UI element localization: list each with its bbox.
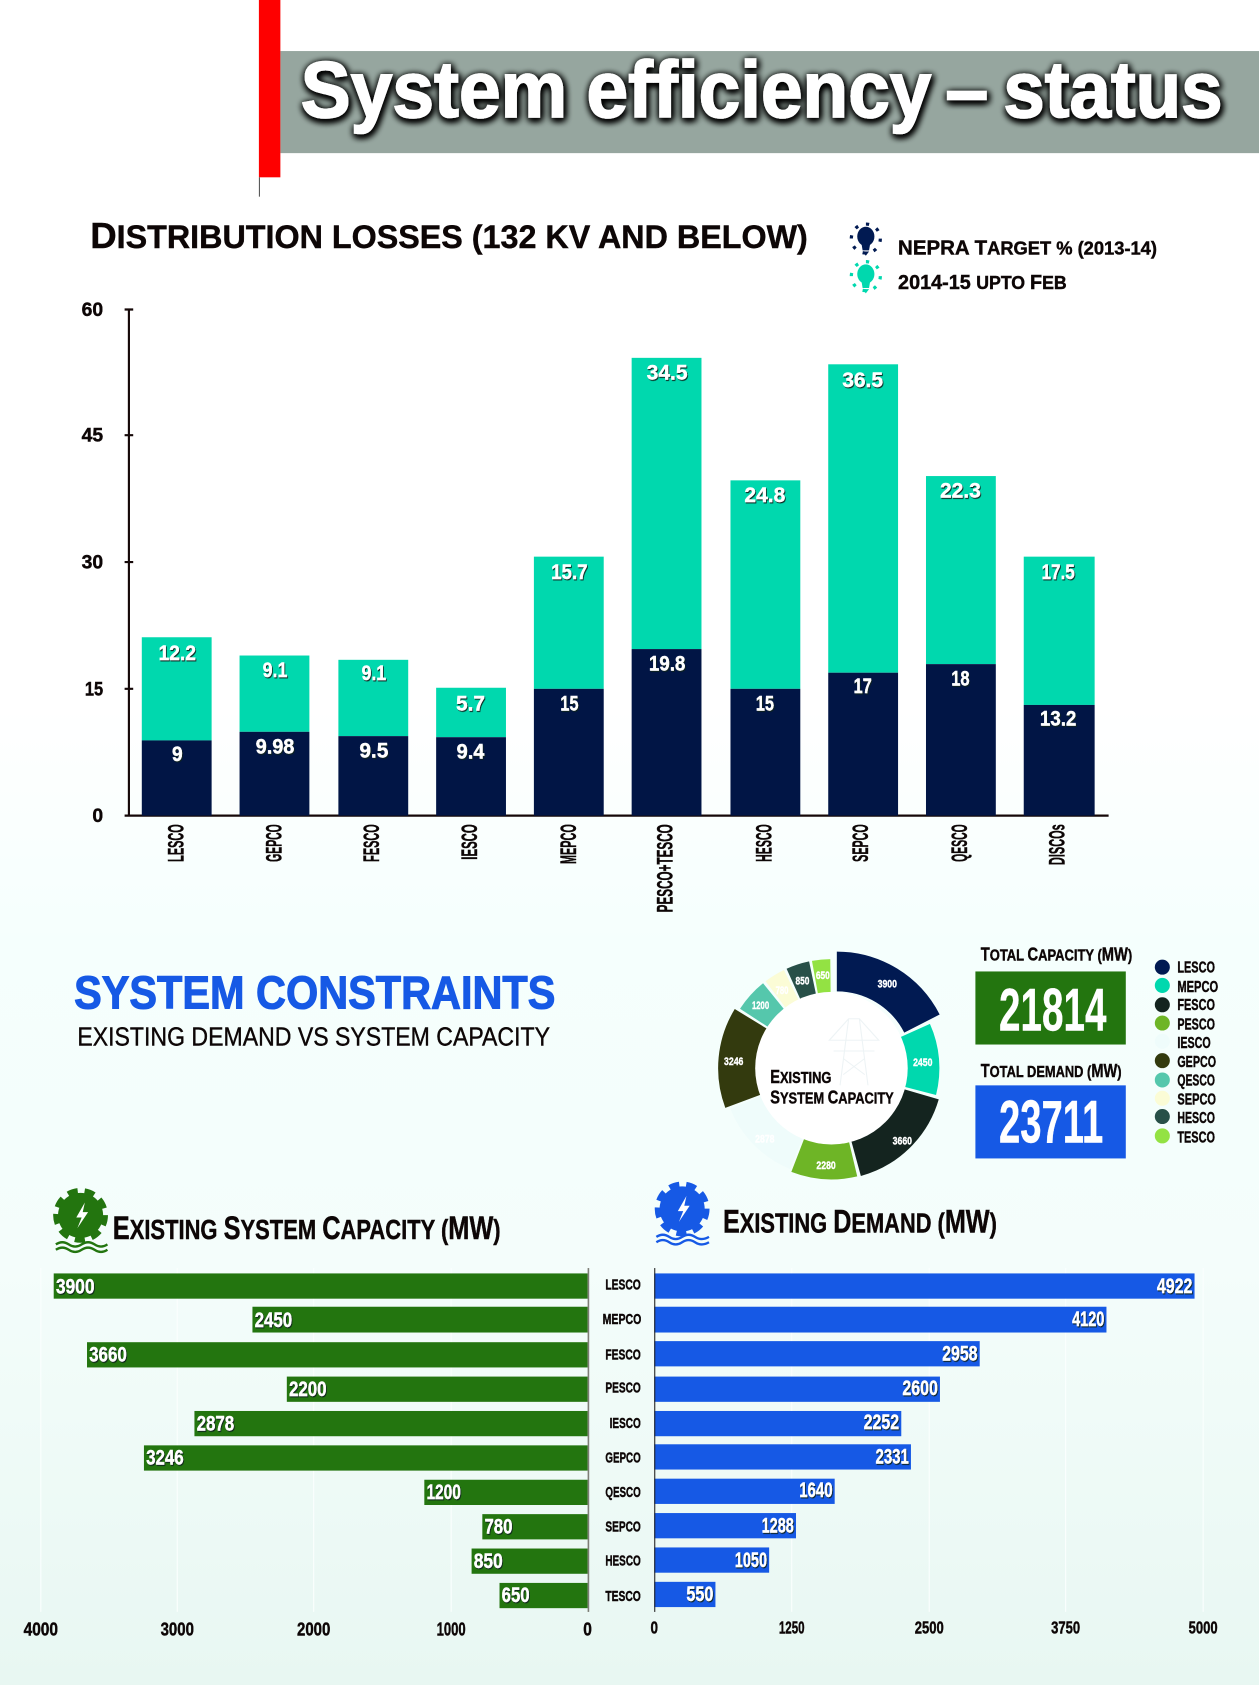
slice values: 2280 bbox=[816, 1160, 836, 1172]
bar: SEPCO bbox=[828, 364, 898, 862]
capacity bars bbox=[54, 1273, 588, 1608]
shared company labels: SEPCO bbox=[605, 1518, 641, 1535]
y axis: 45 bbox=[82, 426, 103, 447]
panel: total capacity: 21814 bbox=[999, 977, 1107, 1044]
demand values bbox=[686, 1274, 1192, 1606]
title text bbox=[301, 45, 1222, 134]
demand axis labels bbox=[650, 1617, 1218, 1637]
bar: MEPCO: 15.7 bbox=[551, 560, 588, 584]
y axis: 30 bbox=[82, 552, 103, 573]
bar chart: existing demand bbox=[650, 1268, 1218, 1637]
panel: total capacity: TOTAL CAPACITY (MW) bbox=[981, 944, 1132, 965]
bar: QESCO: 18 bbox=[951, 667, 970, 691]
demand values: 1640 bbox=[799, 1478, 833, 1502]
slice values: 3900 bbox=[878, 979, 897, 991]
capacity axis labels: 4000 bbox=[24, 1619, 58, 1640]
capacity axis labels: 1000 bbox=[437, 1619, 466, 1640]
capacity values: 780 bbox=[484, 1514, 512, 1538]
bar: HESCO: 15 bbox=[756, 691, 774, 715]
title text: status bbox=[1003, 45, 1222, 134]
title text: System bbox=[301, 45, 567, 134]
demand axis labels: 0 bbox=[650, 1617, 658, 1637]
demand values: 550 bbox=[686, 1582, 713, 1606]
shared company labels: TESCO bbox=[605, 1588, 641, 1605]
shared company labels: GEPCO bbox=[605, 1450, 641, 1467]
bar: DISCOs: 17.5 bbox=[1041, 560, 1075, 584]
capacity values: 3660 bbox=[89, 1343, 127, 1367]
demand values: 2331 bbox=[875, 1445, 909, 1469]
donut legend: SEPCO bbox=[1177, 1091, 1216, 1109]
bar: MEPCO: 15 bbox=[560, 691, 579, 715]
demand values: 2600 bbox=[902, 1376, 938, 1400]
bar: SEPCO: 17 bbox=[853, 674, 872, 698]
demand bars bbox=[654, 1273, 1195, 1607]
capacity values: 850 bbox=[474, 1549, 503, 1573]
capacity axis labels: 3000 bbox=[161, 1619, 194, 1640]
demand values: 1288 bbox=[762, 1513, 794, 1537]
title text: efficiency bbox=[587, 45, 931, 134]
icon: transmission tower bbox=[829, 1019, 879, 1085]
icon: teal bulb bbox=[851, 262, 880, 293]
panel: total demand: TOTAL DEMAND (MW) bbox=[981, 1060, 1121, 1081]
capacity values: 3900 bbox=[56, 1274, 95, 1298]
bar: LESCO: 9 bbox=[172, 742, 183, 766]
heading: existing demand: EXISTING DEMAND (MW) bbox=[723, 1204, 997, 1240]
shared company labels: QESCO bbox=[605, 1484, 641, 1501]
title band bbox=[259, 0, 1259, 197]
demand axis labels: 5000 bbox=[1189, 1617, 1218, 1637]
demand values: 2252 bbox=[864, 1410, 899, 1434]
donut legend: QESCO bbox=[1177, 1071, 1215, 1089]
slice values bbox=[724, 970, 932, 1172]
donut legend: GEPCO bbox=[1177, 1053, 1216, 1071]
bar: PESCO+TESCO: 34.5 bbox=[647, 360, 688, 384]
bar: QESCO: 22.3 bbox=[940, 479, 981, 503]
capacity axis labels: 2000 bbox=[297, 1619, 330, 1640]
bar: IESCO: IESCO bbox=[457, 824, 482, 860]
bar: MEPCO bbox=[534, 557, 604, 864]
stacked bar chart: distribution losses bbox=[82, 300, 1109, 912]
demand values: 2958 bbox=[942, 1341, 978, 1365]
donut legend bbox=[1155, 959, 1218, 1146]
demand values: 4922 bbox=[1157, 1274, 1192, 1298]
bar: HESCO bbox=[730, 480, 800, 862]
demand axis labels: 1250 bbox=[779, 1617, 805, 1637]
bar: GEPCO: GEPCO bbox=[261, 824, 286, 862]
capacity values: 2450 bbox=[255, 1308, 292, 1332]
shared company labels: LESCO bbox=[605, 1277, 641, 1294]
bar: GEPCO: 9.98 bbox=[256, 734, 294, 758]
slice values: 2878 bbox=[755, 1133, 775, 1145]
slice values: 2450 bbox=[913, 1057, 932, 1069]
slices bbox=[702, 939, 961, 1198]
icon: navy bulb bbox=[851, 224, 880, 256]
donut legend: TESCO bbox=[1177, 1128, 1215, 1146]
shared company labels: PESCO bbox=[605, 1380, 641, 1397]
panel: total capacity bbox=[975, 944, 1132, 1045]
donut legend: HESCO bbox=[1177, 1109, 1215, 1127]
demand axis labels: 3750 bbox=[1051, 1617, 1080, 1637]
shared company labels: HESCO bbox=[605, 1553, 641, 1570]
slice values: 1200 bbox=[752, 1000, 769, 1012]
chart legend: NEPRA TARGET % (2013-14) bbox=[898, 238, 1157, 260]
bar: FESCO: 9.5 bbox=[359, 739, 388, 763]
donut legend: FESCO bbox=[1177, 996, 1215, 1014]
bar: GEPCO: 9.1 bbox=[263, 658, 287, 682]
bar: LESCO bbox=[142, 637, 212, 862]
y axis bbox=[82, 300, 1109, 827]
capacity axis labels bbox=[24, 1619, 592, 1640]
slice values: 3246 bbox=[724, 1056, 743, 1068]
bar: FESCO bbox=[338, 660, 408, 862]
bar: SEPCO: SEPCO bbox=[848, 824, 873, 862]
section heading: system constraints bbox=[74, 967, 555, 1052]
chart heading: distribution losses: DISTRIBUTION LOSSES (132 KV AND BELOW) bbox=[90, 215, 808, 256]
bar chart: existing system capacity bbox=[24, 1268, 592, 1640]
icon: blue gear with bolt and waves bbox=[656, 1184, 709, 1244]
shared company labels: IESCO bbox=[610, 1415, 641, 1432]
donut legend: MEPCO bbox=[1177, 978, 1218, 996]
donut centre label: SYSTEM CAPACITY bbox=[770, 1087, 894, 1108]
donut legend: PESCO bbox=[1177, 1015, 1215, 1033]
bar: LESCO: LESCO bbox=[164, 824, 189, 862]
capacity values: 2200 bbox=[289, 1377, 327, 1401]
demand axis labels: 2500 bbox=[915, 1617, 944, 1637]
bar: PESCO+TESCO: PESCO+TESCO bbox=[652, 824, 677, 912]
donut legend: LESCO bbox=[1177, 959, 1215, 977]
demand values: 1050 bbox=[735, 1548, 767, 1572]
capacity values: 3246 bbox=[146, 1446, 184, 1470]
slice values: 780 bbox=[776, 985, 788, 997]
donut centre label: EXISTING bbox=[770, 1066, 831, 1087]
y axis: 15 bbox=[85, 679, 103, 700]
slice values: 3660 bbox=[893, 1135, 912, 1147]
bar: QESCO bbox=[926, 476, 996, 862]
donut legend: IESCO bbox=[1177, 1034, 1211, 1052]
capacity values: 2878 bbox=[197, 1411, 234, 1435]
shared company labels bbox=[603, 1277, 642, 1605]
bar: FESCO: FESCO bbox=[359, 824, 384, 862]
bar: QESCO: QESCO bbox=[947, 824, 972, 862]
slice values: 850 bbox=[795, 975, 809, 987]
bar: DISCOs: 13.2 bbox=[1040, 706, 1076, 730]
subheading: EXISTING DEMAND VS SYSTEM CAPACITY bbox=[77, 1024, 550, 1052]
heading: existing system capacity: EXISTING SYSTEM CAPACITY (MW) bbox=[113, 1210, 501, 1246]
bar: IESCO: 5.7 bbox=[456, 691, 485, 715]
bar: PESCO+TESCO: 19.8 bbox=[649, 652, 685, 676]
y axis: 0 bbox=[92, 806, 103, 827]
panel: total demand: 23711 bbox=[999, 1088, 1103, 1155]
slice values: 650 bbox=[816, 970, 830, 982]
bar: LESCO: 12.2 bbox=[158, 641, 196, 665]
chart legend: 2014-15 UPTO FEB bbox=[898, 272, 1067, 294]
bar: IESCO: 9.4 bbox=[457, 740, 485, 764]
capacity values bbox=[56, 1274, 530, 1607]
capacity values: 1200 bbox=[426, 1480, 461, 1504]
capacity axis labels: 0 bbox=[583, 1619, 592, 1640]
bar: PESCO+TESCO bbox=[632, 358, 701, 912]
demand values: 4120 bbox=[1072, 1307, 1104, 1331]
capacity values: 650 bbox=[502, 1583, 530, 1607]
donut chart: existing system capacity bbox=[702, 939, 961, 1198]
section heading: system constraints: SYSTEM CONSTRAINTS bbox=[74, 967, 555, 1019]
title text: – bbox=[945, 45, 988, 134]
chart legend bbox=[851, 224, 1157, 294]
bar: DISCOs: DISCOs bbox=[1045, 824, 1070, 865]
panel: total demand bbox=[975, 1060, 1126, 1158]
bar: MEPCO: MEPCO bbox=[556, 824, 581, 864]
shared company labels: MEPCO bbox=[603, 1311, 642, 1328]
bar: IESCO bbox=[436, 688, 506, 860]
y axis: 60 bbox=[82, 300, 103, 321]
bar: SEPCO: 36.5 bbox=[842, 368, 883, 392]
shared company labels: FESCO bbox=[605, 1346, 641, 1363]
bar: FESCO: 9.1 bbox=[361, 661, 386, 685]
bar: HESCO: HESCO bbox=[751, 824, 776, 862]
icon: green gear with bolt and waves bbox=[56, 1191, 107, 1252]
donut centre label bbox=[770, 1066, 894, 1108]
bar: HESCO: 24.8 bbox=[744, 483, 785, 507]
bar: GEPCO bbox=[240, 656, 309, 862]
bar: DISCOs bbox=[1024, 557, 1095, 865]
